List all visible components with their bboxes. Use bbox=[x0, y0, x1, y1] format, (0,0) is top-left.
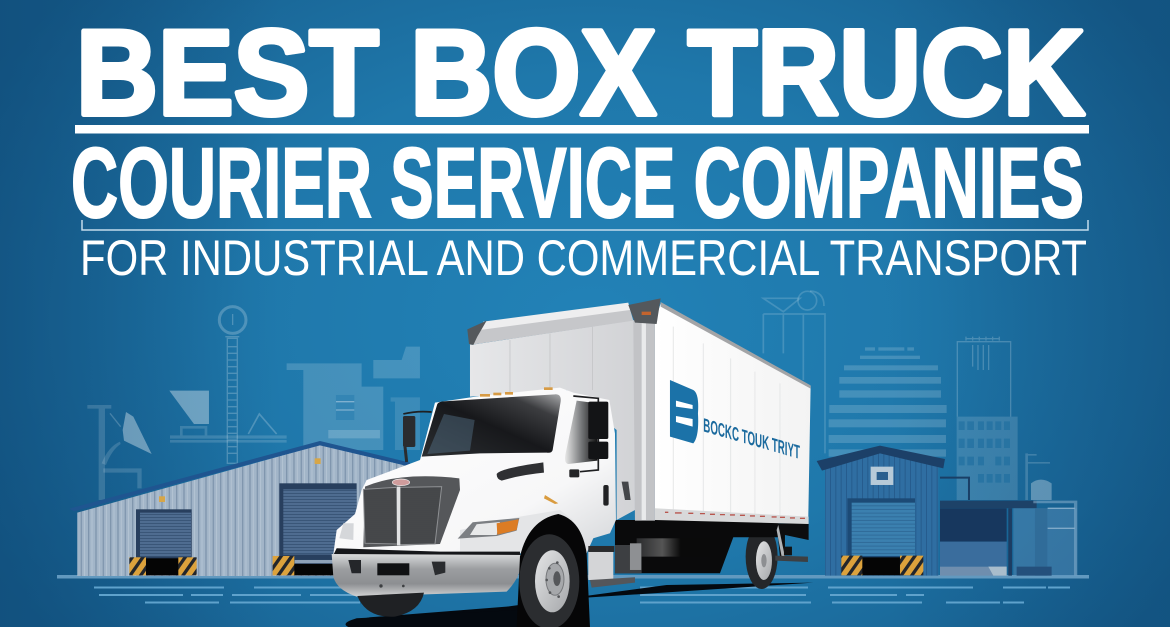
left skyline silhouettes bbox=[87, 307, 420, 500]
large door bbox=[273, 483, 357, 575]
fender crease bbox=[544, 495, 558, 504]
warehouse wall bbox=[77, 445, 410, 576]
icon: hopper conveyor bbox=[169, 391, 287, 443]
striped dome building bbox=[829, 347, 947, 457]
windshield reflection bbox=[427, 414, 475, 454]
warehouse body bbox=[825, 451, 938, 576]
title: best box truck: BEST BOX TRUCK bbox=[76, 4, 1085, 140]
cab body bbox=[333, 388, 616, 554]
grille panels bbox=[363, 487, 442, 545]
front headlights bbox=[339, 518, 519, 540]
left warehouse bbox=[69, 441, 410, 576]
door handles bbox=[603, 482, 631, 506]
lower cab trim bbox=[333, 548, 520, 555]
pole and tank bbox=[1025, 453, 1052, 500]
front wheel bbox=[519, 534, 579, 627]
factory silhouette bbox=[287, 347, 420, 450]
side structure bbox=[1013, 501, 1077, 576]
left front wheel bbox=[357, 593, 424, 617]
warehouse roof bbox=[817, 446, 945, 471]
front bumper bbox=[332, 554, 523, 597]
right warehouse bbox=[817, 446, 1077, 576]
ground shadow bbox=[346, 583, 813, 627]
windshield bbox=[422, 394, 561, 457]
grille badge bbox=[392, 479, 410, 486]
subtitle bracket bbox=[82, 220, 1088, 230]
small door bbox=[129, 509, 197, 575]
side window bbox=[565, 401, 597, 464]
truck lettering: BOCKC TOUK TRIYT bbox=[703, 415, 800, 464]
warehouse roof bbox=[69, 441, 410, 511]
cargo box front bbox=[467, 298, 661, 521]
wheel arch bbox=[517, 514, 590, 627]
side mirrors bbox=[403, 396, 608, 477]
icon: gauge tower bbox=[219, 307, 246, 463]
tower outline bbox=[957, 337, 1011, 417]
icon: satellite dish mast bbox=[87, 405, 152, 500]
cab steps bbox=[588, 543, 642, 588]
wall lights bbox=[159, 458, 321, 502]
hood vent bbox=[497, 462, 544, 481]
rear wheel bbox=[746, 524, 778, 589]
title rule bbox=[75, 125, 1089, 134]
fender shading bbox=[460, 510, 573, 553]
box truck bbox=[332, 298, 811, 627]
truck logo bbox=[670, 380, 698, 443]
rub rail bbox=[655, 508, 809, 524]
box corner caps bbox=[628, 298, 661, 324]
ground lines bbox=[57, 575, 1089, 604]
chassis bbox=[615, 520, 809, 573]
cargo box side bbox=[655, 302, 811, 524]
right skyline silhouettes bbox=[763, 291, 1052, 500]
office block with windows bbox=[957, 417, 1018, 500]
loading canopy bbox=[940, 477, 1037, 576]
marker lights bbox=[480, 387, 553, 397]
crane frame outline bbox=[763, 291, 825, 453]
roller door bbox=[841, 498, 923, 575]
wall sign bbox=[871, 467, 893, 485]
grille housing bbox=[363, 476, 460, 547]
